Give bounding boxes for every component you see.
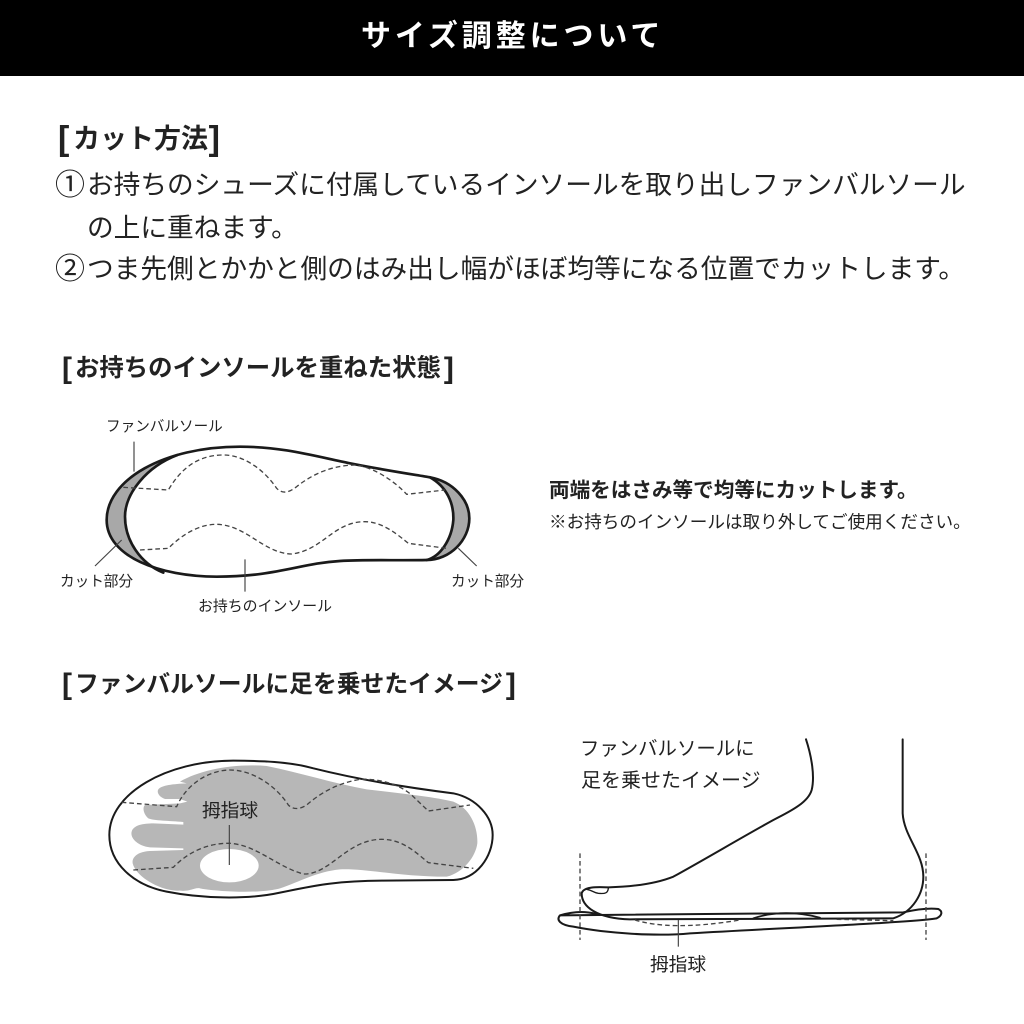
instructions text: つま先側とかかと側のはみ出し幅がほぼ均等になる位置でカットします。 bbox=[87, 254, 965, 284]
title: サイズ調整について bbox=[361, 20, 664, 53]
heading: cut method bbox=[58, 120, 220, 158]
label: ball of big toe, side view: 拇指球 bbox=[650, 954, 706, 975]
heading: foot on sole: [ bbox=[62, 668, 72, 701]
heading: overlaid insole state: [ bbox=[62, 352, 72, 385]
heading: cut method: ] bbox=[209, 120, 220, 158]
instructions text: お持ちのシューズに付属しているインソールを取り出しファンバルソール bbox=[87, 170, 966, 200]
heading: overlaid insole state: お持ちのインソールを重ねた状態 bbox=[75, 355, 441, 382]
label: your insole: お持ちのインソール bbox=[198, 599, 332, 615]
heading: foot on sole: ファンバルソールに足を乗せたイメージ bbox=[75, 671, 503, 698]
header band bbox=[0, 0, 1024, 76]
label: cut part left: カット部分 bbox=[60, 574, 133, 590]
note: remove insole: ※お持ちのインソールは取り外してご使用ください。 bbox=[549, 512, 971, 532]
callout: cut evenly: 両端をはさみ等で均等にカットします。 bbox=[549, 479, 918, 502]
label: cut part right: カット部分 bbox=[451, 574, 524, 590]
label: fan-bal sole: ファンバルソール bbox=[106, 419, 223, 435]
label: image caption: ファンバルソールに bbox=[580, 738, 755, 760]
instructions text: ② bbox=[55, 253, 85, 286]
instructions text: ① bbox=[55, 169, 85, 202]
heading: cut method: カット方法 bbox=[73, 124, 208, 154]
instructions text bbox=[55, 169, 966, 286]
label: ball of big toe, top view: 拇指球 bbox=[202, 800, 258, 821]
instructions text: の上に重ねます。 bbox=[87, 213, 298, 243]
heading: cut method: [ bbox=[58, 120, 69, 158]
label: image caption line 2: 足を乗せたイメージ bbox=[581, 770, 761, 792]
heading: foot on sole: ] bbox=[506, 668, 516, 701]
heading: overlaid insole state: ] bbox=[444, 352, 454, 385]
